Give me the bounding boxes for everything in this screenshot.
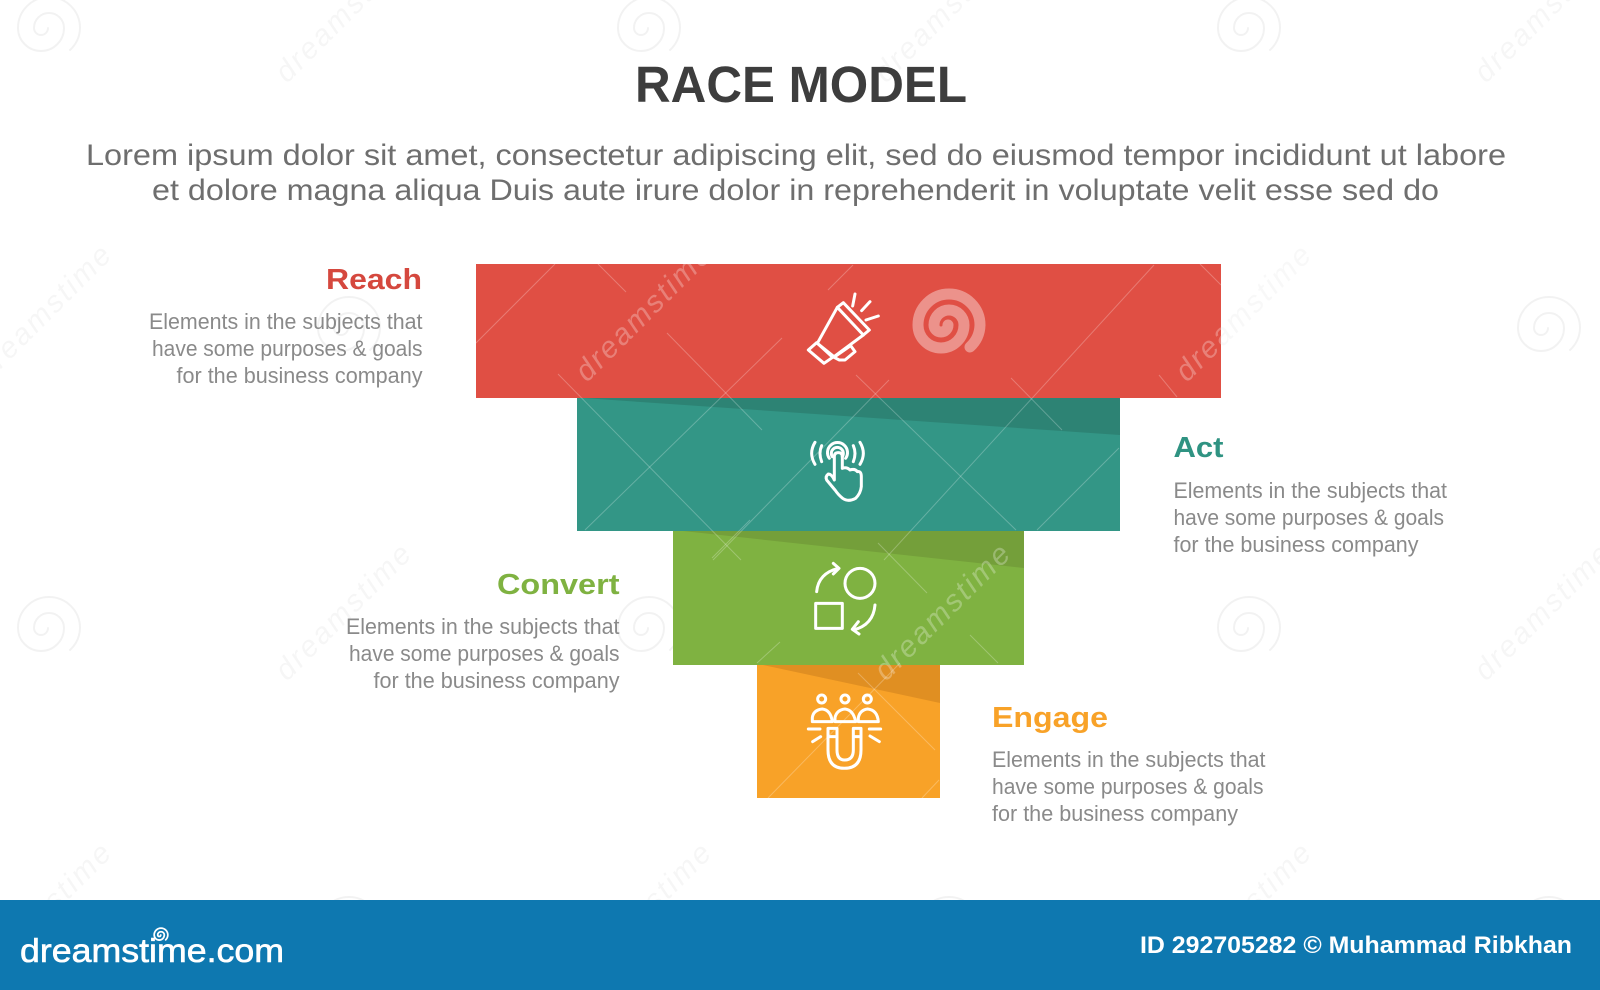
watermark overlay on funnel	[476, 264, 1221, 798]
label block: reach: Reach	[326, 264, 422, 296]
icon: people and magnet	[808, 695, 881, 768]
label block: engage: have some purposes & goals	[992, 774, 1264, 799]
label block: engage	[992, 702, 1266, 826]
label block: engage: Elements in the subjects that	[992, 747, 1266, 772]
label block: reach: Elements in the subjects that	[149, 309, 422, 334]
watermark layer on white background: dreamstime	[269, 538, 418, 687]
label block: convert: Elements in the subjects that	[346, 614, 620, 639]
watermark layer on white background: dreamstime	[569, 837, 718, 986]
label block: act: Act	[1174, 432, 1224, 464]
watermark overlay on funnel: dreamstime	[1169, 239, 1318, 388]
footer logo: dreamstime.com	[20, 932, 284, 969]
subtitle text block: Lorem ipsum dolor sit amet, consectetur adipiscing elit, sed do eiusmod tempor incididunt ut labore	[86, 139, 1506, 172]
watermark layer on white background: dreamstime	[1169, 239, 1318, 388]
icon: shapes with arrows	[816, 563, 875, 634]
label block: reach: have some purposes & goals	[152, 336, 422, 361]
label block: engage: for the business company	[992, 801, 1238, 826]
label block: act: for the business company	[1174, 532, 1418, 557]
label block: act	[1174, 432, 1447, 557]
footer band	[0, 900, 1600, 990]
subtitle text block: et dolore magna aliqua Duis aute irure dolor in reprehenderit in voluptate velit esse sed do	[152, 174, 1439, 207]
funnel tier: engage	[757, 665, 940, 798]
footer credit: ID 292705282 © Muhammad Ribkhan	[1140, 932, 1572, 959]
icon: touch hand	[812, 442, 863, 500]
watermark layer on white background: dreamstime	[1169, 837, 1318, 986]
label block: convert: for the business company	[374, 668, 620, 693]
label block: act: have some purposes & goals	[1174, 505, 1444, 530]
subtitle text block	[86, 139, 1506, 207]
label block: reach: for the business company	[176, 363, 422, 388]
label block: convert: Convert	[497, 569, 620, 601]
watermark overlay on funnel: dreamstime	[569, 239, 718, 388]
label block: engage: Engage	[992, 702, 1108, 734]
title: RACE MODEL	[635, 56, 967, 113]
label block: reach	[149, 264, 422, 388]
funnel chart	[476, 264, 1221, 798]
funnel tier: convert	[673, 531, 1024, 665]
label block: convert	[346, 569, 620, 693]
funnel tier: act	[577, 398, 1120, 531]
icon: megaphone	[808, 294, 878, 363]
label block: act: Elements in the subjects that	[1174, 478, 1447, 503]
watermark overlay on funnel: dreamstime	[868, 538, 1017, 687]
label block: convert: have some purposes & goals	[349, 641, 620, 666]
funnel tier: reach	[476, 264, 1221, 398]
